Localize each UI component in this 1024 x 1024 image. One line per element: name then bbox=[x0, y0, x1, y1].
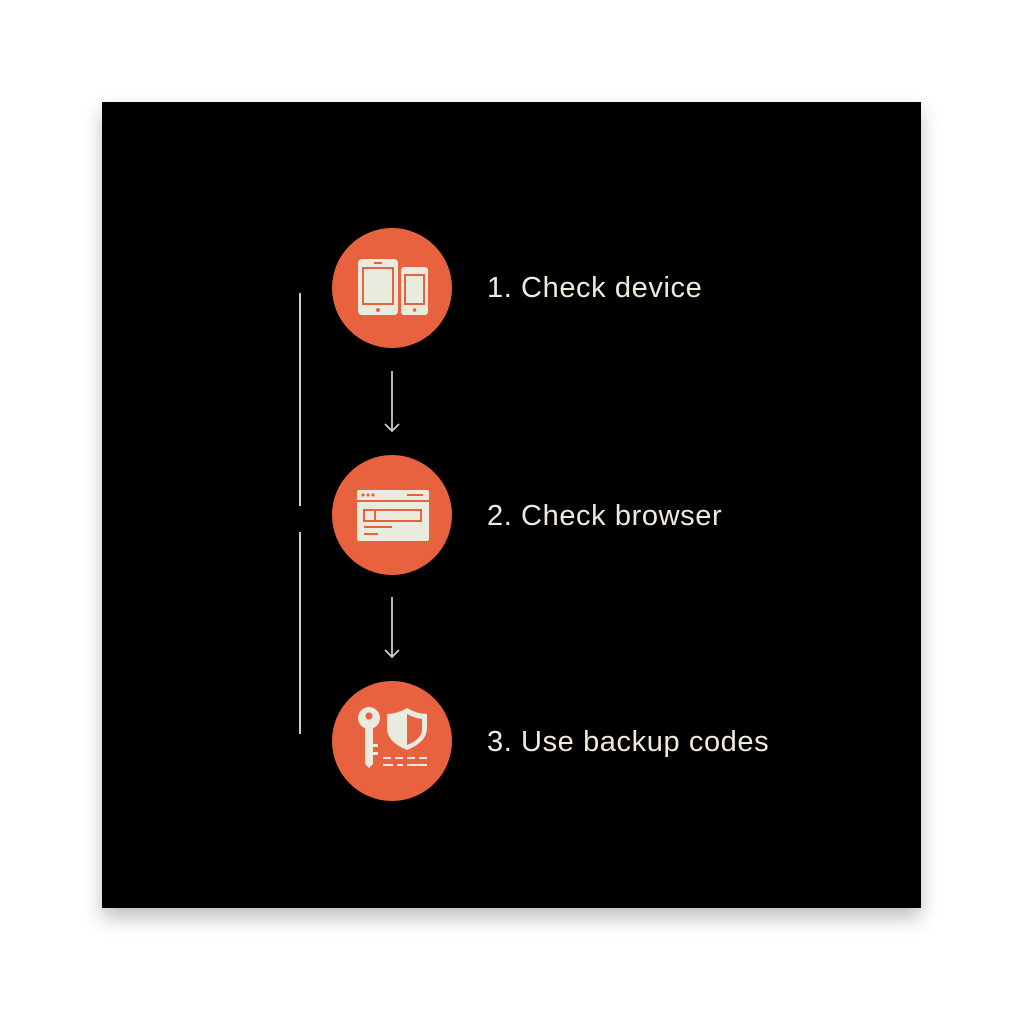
side line 1 bbox=[299, 293, 301, 506]
label: step 3: 3. Use backup codes bbox=[487, 726, 769, 758]
icon: key and shield bbox=[332, 681, 452, 801]
arrow 1 bbox=[385, 371, 399, 431]
arrow 2 bbox=[385, 597, 399, 657]
icon: browser bbox=[332, 455, 452, 575]
panel: background bbox=[102, 102, 921, 908]
label: step 2: 2. Check browser bbox=[487, 500, 722, 532]
icon: devices bbox=[332, 228, 452, 348]
label: step 1: 1. Check device bbox=[487, 272, 702, 304]
side line 2 bbox=[299, 532, 301, 734]
